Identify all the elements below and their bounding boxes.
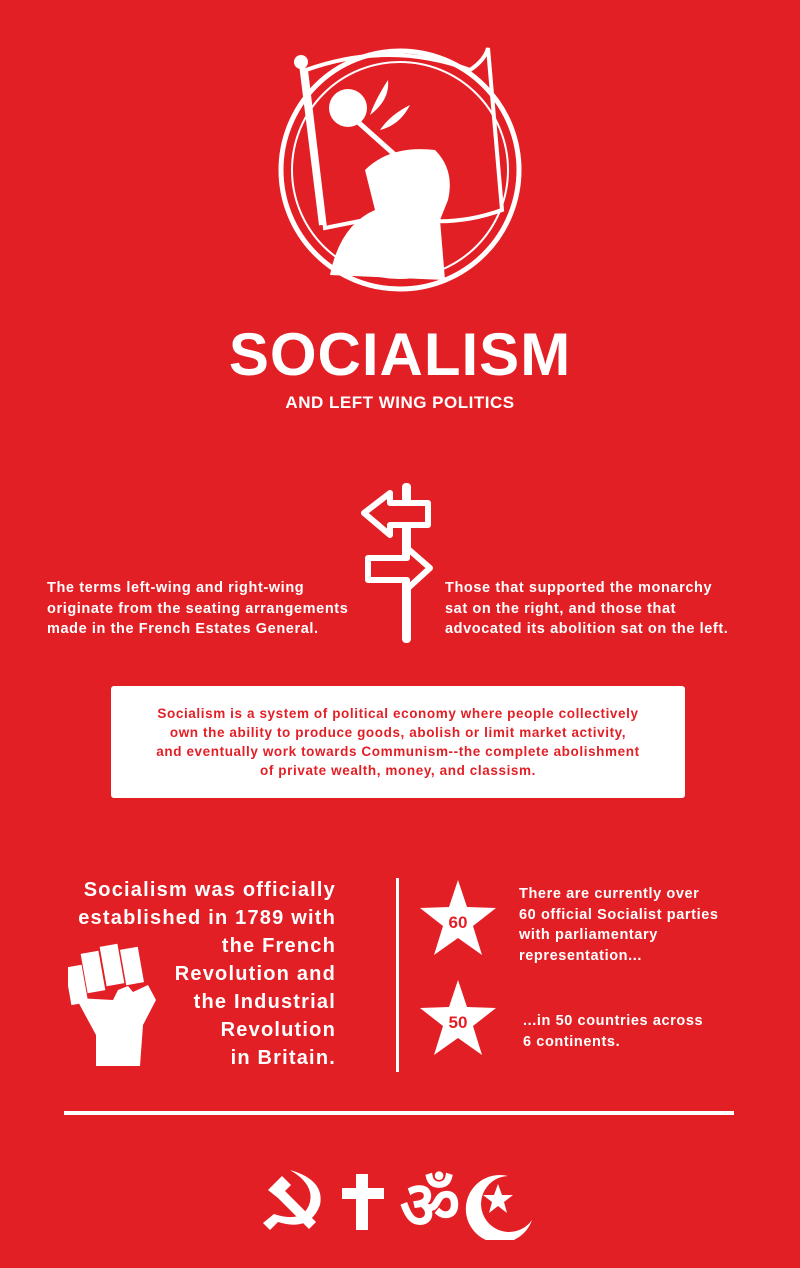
- text: 60 parties: There are currently over: [519, 886, 699, 902]
- callout: definition: Socialism is a system of political economy where people collectively: [157, 706, 639, 721]
- text: monarchy seating: advocated its abolition sat on the left.: [445, 621, 728, 637]
- callout: definition: of private wealth, money, and classism.: [260, 763, 536, 778]
- icons: symbols: [263, 1167, 532, 1240]
- title: SOCIALISM: [229, 321, 571, 388]
- callout: definition: and eventually work towards Communism--the complete abolishment: [156, 744, 640, 759]
- icon: star 60: 60: [449, 913, 467, 932]
- icon: emblem fist rose flag: [278, 48, 522, 292]
- text: 50 countries: ...in 50 countries across: [523, 1013, 703, 1029]
- icon: star 60: [420, 880, 496, 955]
- text: left-wing origin: The terms left-wing and right-wing: [47, 580, 304, 596]
- callout: definition: own the ability to produce goods, abolish or limit market activity,: [170, 725, 626, 740]
- text: monarchy seating: sat on the right, and those that: [445, 600, 676, 616]
- icon: star 50: 50: [449, 1013, 467, 1032]
- text: left-wing origin: [47, 580, 348, 637]
- subtitle: AND LEFT WING POLITICS: [285, 393, 515, 412]
- text: left-wing origin: made in the French Estates General.: [47, 621, 319, 637]
- callout: definition: [111, 686, 685, 798]
- text: 1789: in Britain.: [231, 1047, 336, 1069]
- text: 1789: the Industrial: [194, 991, 336, 1013]
- text: 60 parties: 60 official Socialist parties: [519, 906, 719, 922]
- divider vertical: [396, 878, 399, 1072]
- text: 1789: [78, 879, 336, 1069]
- text: 60 parties: representation...: [519, 948, 642, 964]
- icon: signpost: [361, 483, 433, 643]
- text: monarchy seating: [445, 580, 728, 637]
- icon: star 50: [420, 980, 496, 1055]
- text: 1789: Socialism was officially: [84, 879, 336, 901]
- text: 1789: the French: [222, 935, 336, 957]
- text: 1789: Revolution and: [175, 963, 336, 985]
- text: monarchy seating: Those that supported the monarchy: [445, 580, 712, 596]
- text: 50 countries: 6 continents.: [523, 1034, 620, 1050]
- divider horizontal: [64, 1111, 734, 1115]
- text: 60 parties: with parliamentary: [519, 927, 658, 943]
- text: 1789: Revolution: [221, 1019, 336, 1041]
- text: 1789: established in 1789 with: [78, 907, 336, 929]
- text: 60 parties: [519, 886, 719, 964]
- icon: raised fist: [68, 944, 156, 1066]
- text: left-wing origin: originate from the seating arrangements: [47, 600, 348, 616]
- text: 50 countries: [523, 1013, 703, 1050]
